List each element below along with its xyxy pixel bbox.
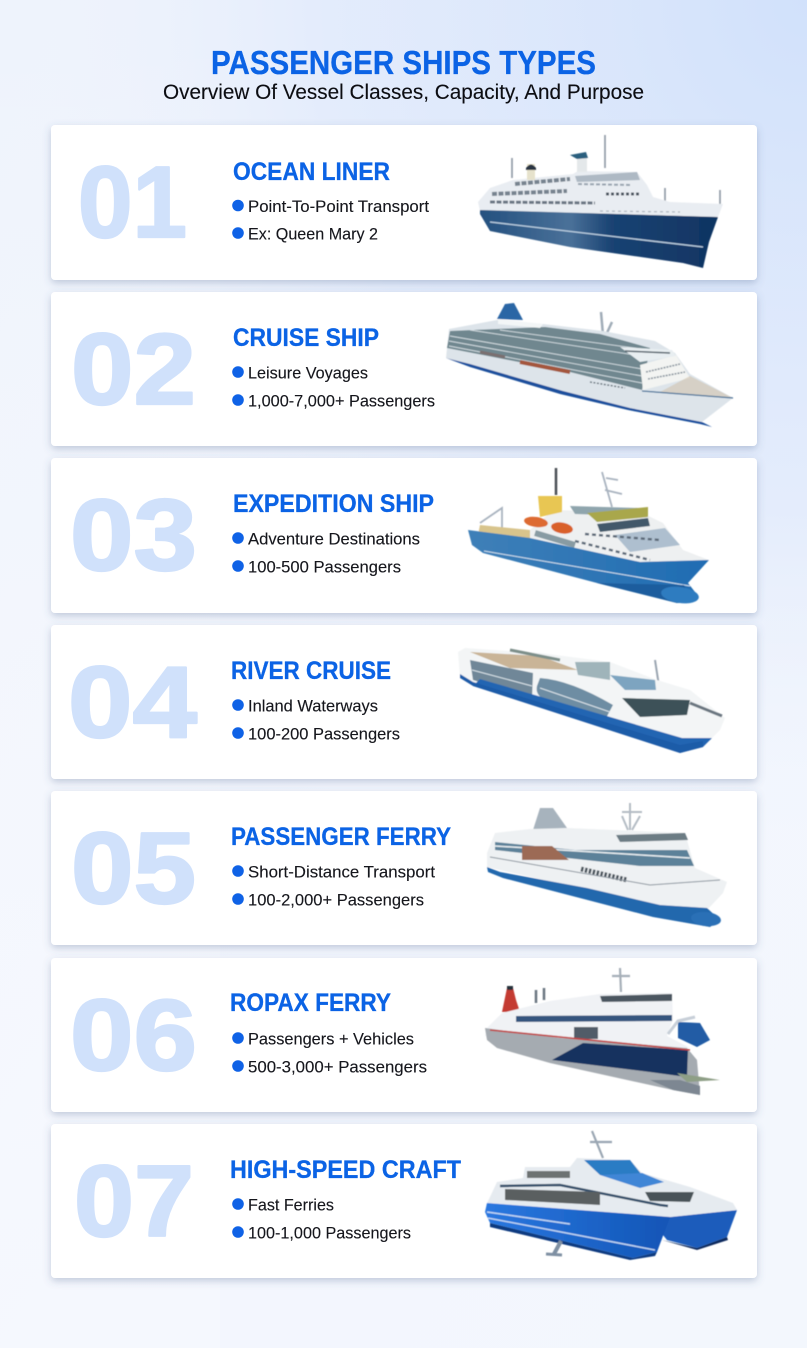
bullet: passengers + vehicles: Passengers + Vehicles [248, 1030, 414, 1048]
title: PASSENGER SHIPS TYPES [211, 44, 596, 81]
panel: 03 expedition ship [51, 458, 757, 613]
panel: 06 ropax ferry [51, 958, 757, 1112]
bullet: adventure destinations: Adventure Destinations [248, 530, 420, 548]
icon: ropax ferry [485, 968, 720, 1095]
panel: 01 ocean liner [51, 125, 757, 280]
bullet: 100-200 passengers: 100-200 Passengers [248, 726, 400, 744]
panel: 07 high-speed craft [51, 1124, 757, 1278]
heading: ocean liner: OCEAN LINER [233, 158, 390, 186]
bullet: short-distance transport: Short-Distance Transport [248, 864, 435, 882]
panel: 04 river cruise [51, 625, 757, 779]
heading: cruise ship: CRUISE SHIP [233, 324, 379, 352]
number 01: 01 [78, 147, 187, 259]
heading: river cruise: RIVER CRUISE [231, 657, 391, 685]
heading: ropax ferry: ROPAX FERRY [230, 989, 391, 1017]
bullet: 100-500 passengers: 100-500 Passengers [248, 558, 401, 576]
number 07: 07 [74, 1146, 194, 1258]
icon: ocean liner ship [478, 135, 723, 268]
number 02: 02 [71, 314, 196, 426]
bullet: 100-1,000 passengers: 100-1,000 Passengers [248, 1224, 411, 1242]
bullet: 500-3,000+ passengers: 500-3,000+ Passengers [248, 1058, 427, 1076]
icon: high-speed catamaran [485, 1131, 737, 1260]
icon: passenger ferry [487, 803, 727, 928]
panel: 02 cruise ship [51, 292, 757, 446]
number 04: 04 [68, 647, 197, 759]
icon: river cruise ship [458, 648, 725, 753]
panel: 05 passenger ferry [51, 791, 757, 945]
icon: expedition ship [468, 468, 709, 606]
number 06: 06 [70, 980, 197, 1092]
bullet: point-to-point transport: Point-To-Point Transport [248, 198, 429, 216]
bullet: queen mary 2: Ex: Queen Mary 2 [248, 226, 378, 244]
bullet: 1,000-7,000+ passengers: 1,000-7,000+ Passengers [248, 392, 435, 410]
bullet: fast ferries: Fast Ferries [248, 1196, 334, 1214]
heading: high-speed craft: HIGH-SPEED CRAFT [230, 1156, 461, 1184]
bullet: leisure voyages: Leisure Voyages [248, 364, 368, 382]
icon: cruise ship [446, 303, 733, 427]
heading: expedition ship: EXPEDITION SHIP [233, 490, 434, 518]
heading: passenger ferry: PASSENGER FERRY [231, 823, 451, 851]
subtitle: Overview Of Vessel Classes, Capacity, And Purpose [163, 81, 644, 104]
bullet: 100-2,000+ passengers: 100-2,000+ Passengers [248, 892, 424, 910]
number 03: 03 [70, 480, 197, 592]
number 05: 05 [71, 813, 196, 925]
bullet: inland waterways: Inland Waterways [248, 698, 378, 716]
